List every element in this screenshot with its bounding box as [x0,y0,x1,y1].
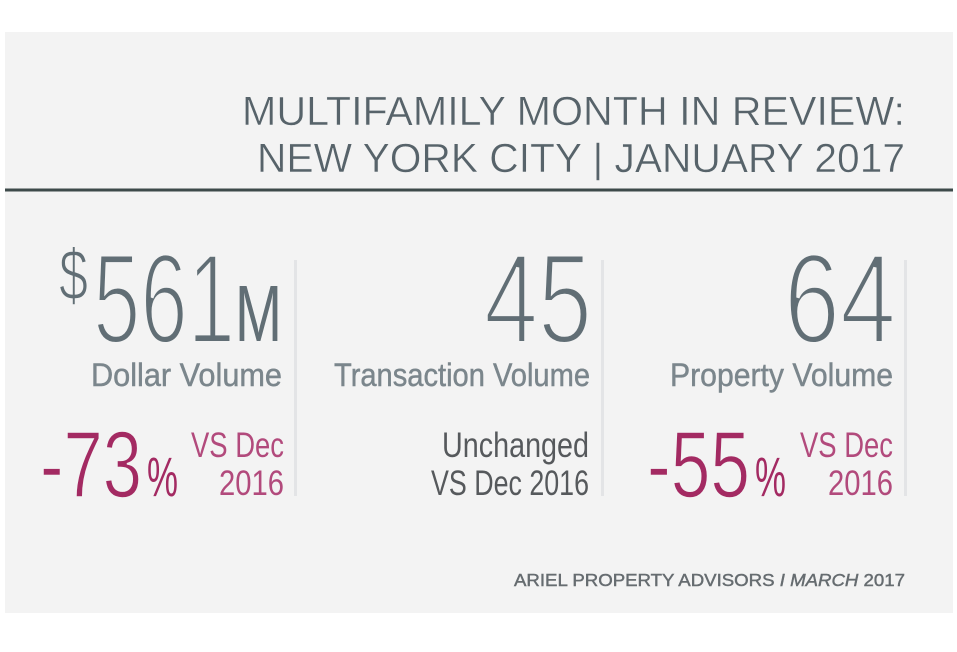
big number: $561M: 561 [93,228,235,371]
panel: dollar volume [40,228,284,518]
big number: $561M: $ [59,236,88,316]
label: dollar volume: Dollar Volume [91,357,282,393]
panel: property volume [647,228,896,518]
comparison: unchanged: VS Dec 2016 [431,464,589,503]
comparison: vs dec 2016 [191,426,284,503]
label: transaction volume: Transaction Volume [334,357,590,393]
title [242,88,905,181]
big number: 45: 45 [484,228,592,371]
comparison: vs dec 2016: 2016 [828,464,893,503]
footer source: ARIEL PROPERTY ADVISORS I MARCH 2017 [514,570,905,590]
comparison: vs dec 2016: VS Dec [191,426,284,465]
change: -55%: % [755,445,786,508]
label: property volume: Property Volume [670,357,893,393]
column dividers [294,260,907,496]
title: NEW YORK CITY | JANUARY 2017 [257,135,905,181]
header rule [5,188,953,192]
comparison: vs dec 2016: 2016 [219,464,284,503]
change: -73%: % [147,445,178,508]
change: -55%: -55 [647,412,750,518]
big number: $561M: M [235,269,282,358]
big number: 64: 64 [784,228,896,371]
comparison: unchanged [431,426,589,503]
comparison: unchanged: Unchanged [442,426,589,465]
comparison: vs dec 2016 [800,426,893,503]
change: -73%: -73 [40,412,142,518]
title: MULTIFAMILY MONTH IN REVIEW: [242,88,905,134]
panel: transaction volume [334,228,592,503]
comparison: vs dec 2016: VS Dec [800,426,893,465]
